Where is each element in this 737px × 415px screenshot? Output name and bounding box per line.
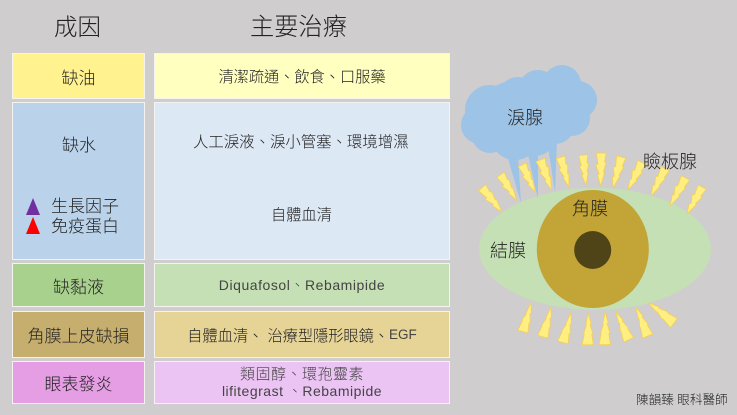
- text: tears and plugs: 人工淚液、淚小管塞、環境增濕: [193, 134, 408, 151]
- meibomian glands: upper lid bolts: [478, 153, 706, 216]
- treatment: epithelial defect: 自體血清、 治療型隱形眼鏡、: [187, 328, 389, 344]
- cornea: [537, 190, 649, 308]
- pupil: [574, 231, 611, 269]
- label: meibomian gland: 瞼板腺: [643, 152, 697, 172]
- treatment: water deficiency: [154, 102, 450, 260]
- text: autologous serum: 自體血清: [271, 207, 332, 224]
- heading: causes: 成因: [54, 14, 101, 40]
- treatment: epithelial defect: [154, 311, 450, 358]
- label: conjunctiva: 結膜: [490, 241, 526, 261]
- label: tear gland: 淚腺: [507, 108, 543, 128]
- treatment: mucin deficiency: [154, 263, 450, 307]
- label: growth factor: 生長因子: [51, 197, 119, 216]
- meibomian glands: lower lid bolts: [518, 298, 678, 345]
- treatment: lipid deficiency: [154, 53, 450, 99]
- cause: inflammation: [12, 361, 145, 404]
- treatment: lipid deficiency: 清潔疏通、飲食、口服藥: [218, 69, 386, 86]
- cause: mucin deficiency: 缺黏液: [53, 278, 104, 296]
- cause: lipid deficiency: 缺油: [62, 68, 96, 88]
- heading: main treatments: 主要治療: [250, 14, 347, 41]
- treatment: inflammation: [154, 361, 450, 404]
- cause: inflammation: 眼表發炎: [44, 375, 112, 394]
- triangle: growth factor: [26, 198, 40, 215]
- label: immunoglobulin: 免疫蛋白: [51, 217, 119, 236]
- treatment: inflammation: 類固醇、環孢靈素: [240, 366, 364, 382]
- label: cornea: 角膜: [572, 199, 608, 219]
- signature: 陳韻臻 眼科醫師: [636, 393, 728, 407]
- cause: water deficiency: [12, 102, 145, 260]
- cause: epithelial defect: [12, 311, 145, 358]
- treatment: inflammation: lifitegrast 、Rebamipide: [222, 382, 382, 398]
- conjunctiva: [479, 188, 711, 310]
- cause: mucin deficiency: [12, 263, 145, 307]
- cause: lipid deficiency: [12, 53, 145, 99]
- treatment: epithelial defect: EGF: [389, 327, 417, 342]
- triangle: immunoglobulin: [26, 217, 40, 234]
- label: water deficiency: 缺水: [62, 136, 96, 155]
- treatment: mucin deficiency: Diquafosol、Rebamipide: [219, 277, 385, 293]
- tear gland: [461, 65, 597, 203]
- cause: epithelial defect: 角膜上皮缺損: [28, 327, 130, 346]
